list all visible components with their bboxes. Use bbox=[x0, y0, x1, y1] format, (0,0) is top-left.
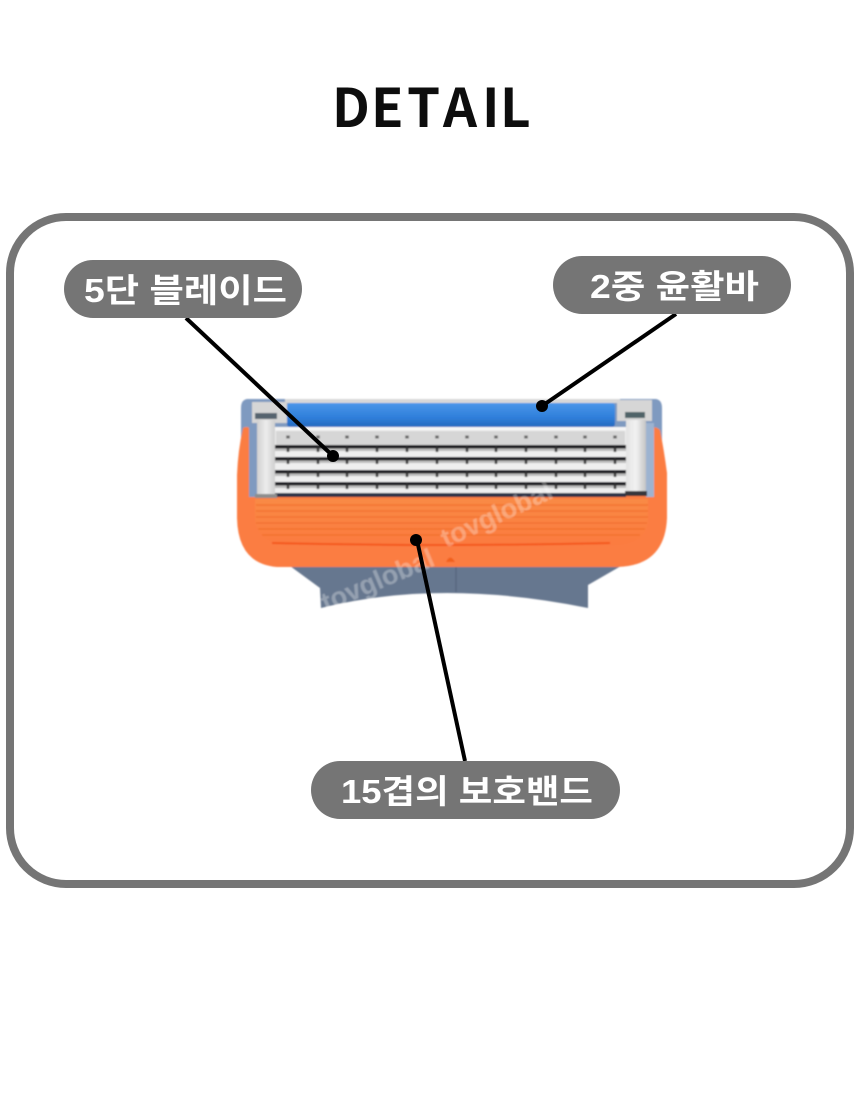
watermark text bbox=[317, 476, 557, 618]
label pill bbox=[64, 260, 302, 318]
leader dot bbox=[536, 400, 548, 412]
leader dot bbox=[327, 450, 339, 462]
watermark text: tovglobal bbox=[317, 543, 439, 618]
leader dot bbox=[410, 534, 422, 546]
label text: 2중 윤활바 bbox=[590, 268, 759, 305]
watermark text: tovglobal bbox=[436, 476, 557, 553]
label text: 15겹의 보호밴드 bbox=[341, 773, 593, 810]
orange guard bbox=[237, 427, 667, 567]
callout: dual lubrication bar bbox=[536, 256, 791, 412]
label pill bbox=[553, 256, 791, 314]
leader line bbox=[186, 318, 333, 456]
blades bbox=[275, 427, 626, 497]
leader line bbox=[542, 314, 676, 406]
label text: 5단 블레이드 bbox=[84, 272, 287, 309]
cartridge back housing bbox=[241, 399, 662, 440]
housing top rim bbox=[285, 399, 620, 403]
callout: 5-layer blade bbox=[64, 260, 339, 462]
cartridge base bbox=[290, 566, 621, 608]
base seam bbox=[455, 567, 457, 592]
label pill bbox=[311, 761, 620, 819]
right blade clip bbox=[617, 400, 654, 497]
left blade clip bbox=[249, 402, 287, 498]
leader line bbox=[417, 540, 465, 761]
callout: 15-layer protective band bbox=[311, 534, 620, 819]
lubrication bar bbox=[287, 403, 615, 427]
illustration: razor cartridge bbox=[237, 399, 667, 618]
panel: detail frame bbox=[10, 217, 850, 884]
protective band ridges bbox=[255, 499, 648, 562]
title: DETAIL bbox=[332, 67, 531, 143]
